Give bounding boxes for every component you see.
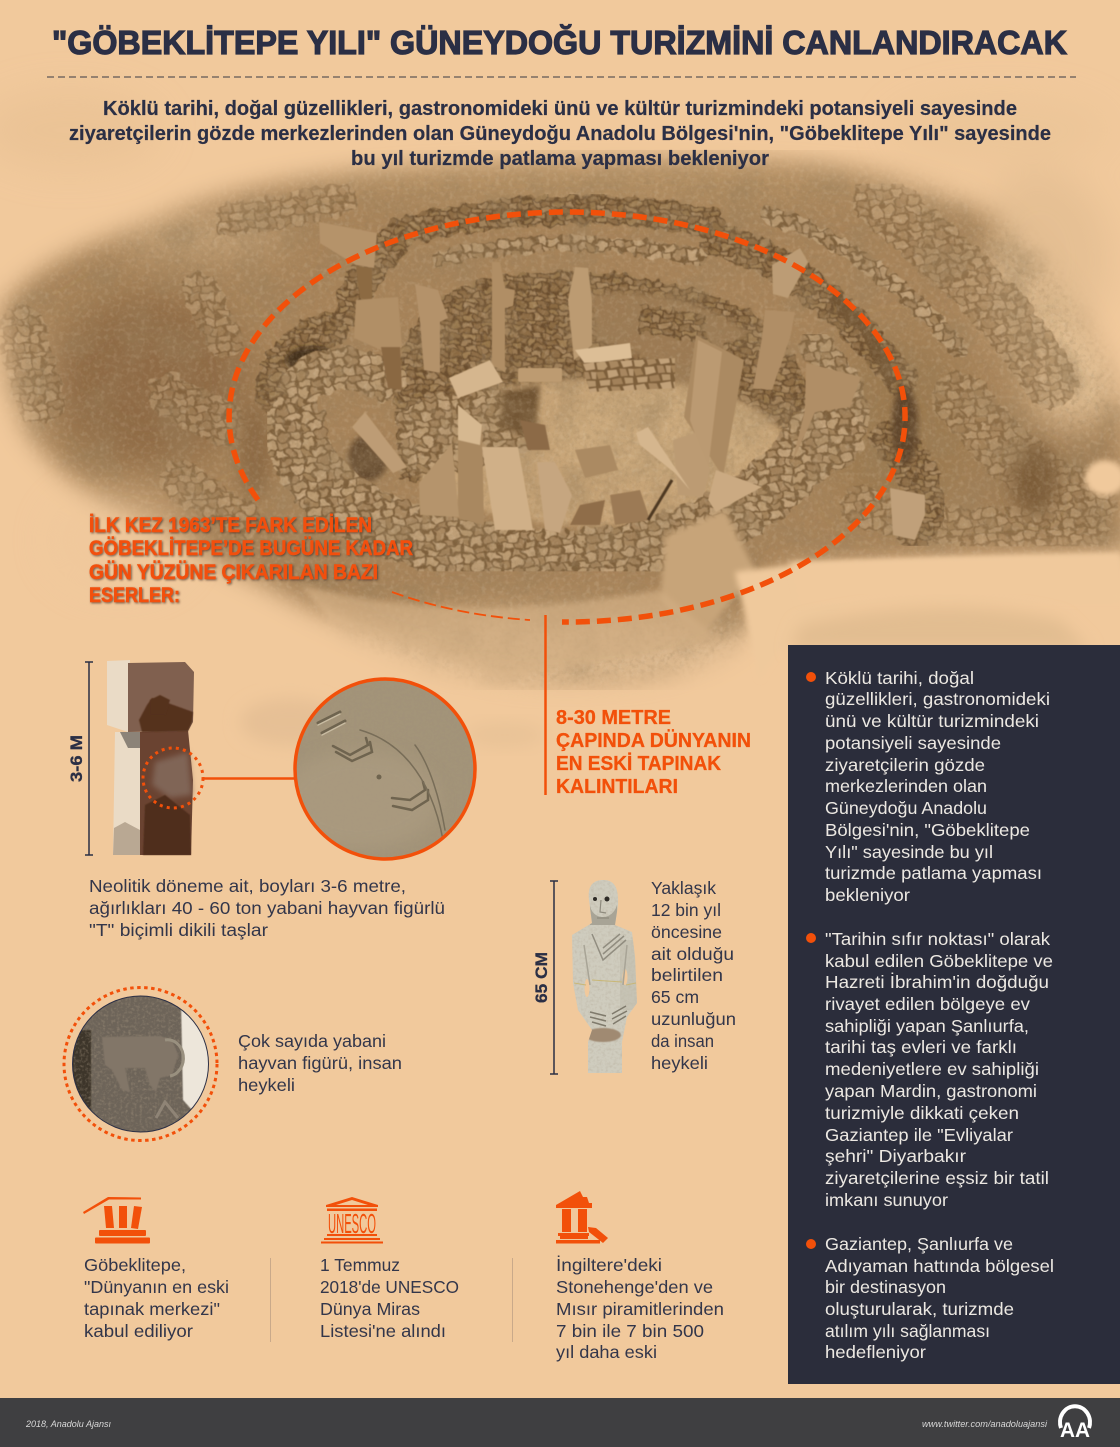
sidebar item 3: oluşturularak, turizmde: [825, 1299, 1014, 1319]
stone pillars: [319, 222, 925, 540]
fact: oldest temple: [84, 1255, 229, 1341]
icon: UNESCO temple: [321, 1197, 383, 1244]
right stepped walls: [640, 303, 712, 345]
fact: UNESCO: 2018'de UNESCO: [320, 1277, 459, 1297]
rubble fields: [20, 200, 1090, 530]
front stone wall: [295, 345, 852, 560]
orange heading: [89, 514, 413, 607]
sidebar item 1: güzellikleri, gastronomideki: [825, 689, 1050, 709]
outer stone walls: [272, 210, 960, 530]
fact: UNESCO: [320, 1255, 459, 1341]
icon: Anadolu Agency logo: AA: [1060, 1419, 1090, 1442]
pillar description: ağırlıkları 40 - 60 ton yabani hayvan figürlü: [89, 898, 445, 918]
statue description: [651, 878, 736, 1073]
zoomed relief circle: [280, 679, 475, 859]
intro text: ziyaretçilerin gözde merkezlerinden olan Güneydoğu Anadolu Bölgesi'nin, "Göbeklitepe Yılı" sayesinde: [69, 123, 1051, 145]
floor: [410, 378, 790, 526]
fact: older than Stonehenge: Mısır piramitlerinden: [556, 1299, 724, 1319]
intro text: bu yıl turizmde patlama yapması bekleniyor: [351, 148, 769, 170]
grain and patches: [0, 150, 1120, 690]
statue description: belirtilen: [651, 965, 723, 985]
sidebar item 2: rivayet edilen bölgeye ev: [825, 994, 1030, 1014]
dashed ellipse highlight: [229, 212, 905, 622]
vertical connector and diameter label: ÇAPINDA DÜNYANIN: [556, 729, 751, 752]
human statue: [572, 880, 637, 1073]
foreground ramp: [660, 510, 755, 640]
title: "GÖBEKLİTEPE YILI" GÜNEYDOĞU TURİZMİNİ CANLANDIRACAK: [52, 24, 1067, 61]
sidebar item 2: medeniyetlere ev sahipliği: [825, 1059, 1039, 1079]
text: UNESCO: [328, 1208, 376, 1239]
statue description: ait olduğu: [651, 944, 734, 964]
sidebar item 2: [806, 929, 1053, 1210]
footer bar: 2018, Anadolu Ajansı: [25, 1419, 111, 1429]
fact: UNESCO: Dünya Miras: [320, 1299, 420, 1319]
fact: oldest temple: kabul ediliyor: [84, 1321, 193, 1341]
pillar description: [89, 876, 445, 940]
pillar description: Neolitik döneme ait, boyları 3-6 metre,: [89, 876, 406, 896]
statue description: 12 bin yıl: [651, 900, 721, 920]
height ruler: 3-6 m: 3-6 M: [67, 735, 86, 782]
sidebar item 2: tarihi taş evleri ve farklı: [825, 1037, 1017, 1057]
icon: collapsing temple: [556, 1191, 608, 1244]
fog over lower right: [50, 460, 1120, 748]
fact: older than Stonehenge: yıl daha eski: [556, 1342, 657, 1362]
fact: older than Stonehenge: İngiltere'deki: [556, 1255, 662, 1275]
statue description: Yaklaşık: [651, 878, 716, 898]
orange heading: GÜN YÜZÜNE ÇIKARILAN BAZI: [89, 561, 378, 584]
dark holes: [283, 343, 330, 368]
vertical connector and diameter label: 8-30 METRE: [556, 707, 671, 729]
sidebar item 3: atılım yılı sağlanması: [825, 1321, 990, 1341]
sidebar item 3: bir destinasyon: [825, 1277, 946, 1297]
intro text: Köklü tarihi, doğal güzellikleri, gastronomideki ünü ve kültür turizmindeki potansiyeli sayesinde: [103, 98, 1017, 120]
orange heading: İLK KEZ 1963’TE FARK EDİLEN: [89, 514, 372, 537]
sidebar item 1: Güneydoğu Anadolu: [825, 798, 987, 818]
footer bar: www.twitter.com/anadoluajansi: [922, 1419, 1048, 1429]
statue description: öncesine: [651, 922, 722, 942]
sidebar item 1: potansiyeli sayesinde: [825, 733, 1001, 753]
fact: UNESCO: Listesi'ne alındı: [320, 1321, 446, 1341]
round relief caption: Çok sayıda yabani: [238, 1031, 386, 1051]
orange heading: ESERLER:: [89, 584, 180, 607]
sidebar item 2: sahipliği yapan Şanlıurfa,: [825, 1016, 1029, 1036]
icon: ruined temple: [83, 1197, 150, 1244]
panel: dark sidebar: [788, 645, 1120, 1384]
sidebar item 1: Köklü tarihi, doğal: [825, 668, 974, 688]
sidebar item 1: Yılı" sayesinde bu yıl: [825, 842, 993, 862]
orange heading: GÖBEKLİTEPE’DE BUGÜNE KADAR: [89, 537, 413, 560]
faint top haze: [0, 90, 1110, 350]
sidebar item 3: [806, 1234, 1054, 1362]
sidebar item 3: Adıyaman hattında bölgesel: [825, 1256, 1054, 1276]
intro text: [69, 98, 1051, 170]
left chamber rubble: [395, 389, 530, 475]
chamber back wall: [394, 271, 810, 480]
sidebar item 1: turizmde patlama yapması: [825, 863, 1042, 883]
fact: oldest temple: tapınak merkezi": [84, 1299, 220, 1319]
sidebar item 2: "Tarihin sıfır noktası" olarak: [825, 929, 1050, 949]
sidebar item 1: Bölgesi'nin, "Göbeklitepe: [825, 820, 1030, 840]
sidebar item 2: Hazreti İbrahim'in doğduğu: [825, 972, 1049, 992]
sidebar item 3: hedefleniyor: [825, 1342, 926, 1362]
statue description: da insan: [651, 1031, 714, 1051]
sidebar item 2: turizmiyle dikkati çeken: [825, 1103, 1019, 1123]
footer bar: [0, 1398, 1120, 1447]
statue description: 65 cm: [651, 987, 699, 1007]
statue description: uzunluğun: [651, 1009, 736, 1029]
fact: oldest temple: Göbeklitepe,: [84, 1255, 186, 1275]
sidebar item 2: kabul edilen Göbeklitepe ve: [825, 951, 1053, 971]
round relief caption: heykeli: [238, 1075, 295, 1095]
icon: Anadolu Agency logo: [1060, 1406, 1090, 1442]
photo ground and walls: [0, 150, 1120, 697]
broad tonal areas: [0, 158, 1120, 697]
pillar description: "T" biçimli dikili taşlar: [89, 920, 268, 940]
T-shaped pillar: [107, 660, 194, 855]
fact: older than Stonehenge: Stonehenge'den ve: [556, 1277, 713, 1297]
sidebar item 3: Gaziantep, Şanlıurfa ve: [825, 1234, 1013, 1254]
fact: older than Stonehenge: [556, 1255, 724, 1362]
photo: excavation site: [0, 150, 1120, 748]
statue description: heykeli: [651, 1053, 708, 1073]
sidebar item 2: imkanı sunuyor: [825, 1190, 948, 1210]
round relief photo: [64, 988, 217, 1140]
round relief caption: [238, 1031, 402, 1095]
detail marker and connector: [143, 748, 294, 808]
vertical connector and diameter label: EN ESKİ TAPINAK: [556, 752, 722, 775]
vertical connector and diameter label: KALINTILARI: [556, 776, 678, 798]
vertical connector and diameter label: [546, 615, 751, 798]
sidebar item 2: ziyaretçilerine eşsiz bir tatil: [825, 1168, 1049, 1188]
fact: older than Stonehenge: 7 bin ile 7 bin 500: [556, 1321, 704, 1341]
sidebar item 1: bekleniyor: [825, 885, 910, 905]
fact: oldest temple: "Dünyanın en eski: [84, 1277, 229, 1297]
sidebar item 1: [806, 668, 1050, 905]
height ruler: 65 cm: 65 CM: [532, 952, 551, 1003]
sidebar item 1: ünü ve kültür turizmindeki: [825, 711, 1039, 731]
round relief caption: hayvan figürü, insan: [238, 1053, 402, 1073]
sidebar item 2: yapan Mardin, gastronomi: [825, 1081, 1037, 1101]
sidebar item 1: merkezlerinden olan: [825, 776, 987, 796]
sidebar item 1: ziyaretçilerin gözde: [825, 755, 985, 775]
sidebar item 2: Gaziantep ile "Evliyalar: [825, 1125, 1013, 1145]
sidebar item 2: şehri" Diyarbakır: [825, 1146, 966, 1166]
fact: UNESCO: 1 Temmuz: [320, 1255, 400, 1275]
